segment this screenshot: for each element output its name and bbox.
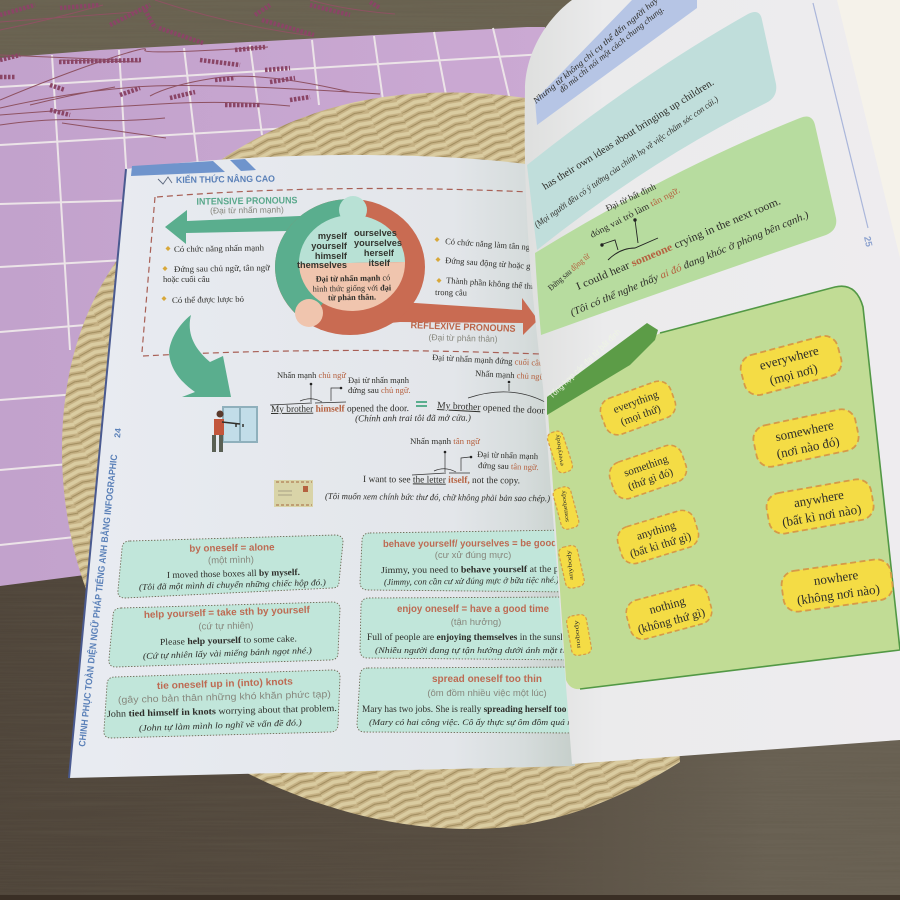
green example panel: I could hear someone crying in the next room.: [574, 195, 783, 293]
pill: something: (thứ gì đó): [626, 466, 675, 493]
left bullets: Có chức năng nhấn mạnh: [174, 242, 265, 254]
sentence 1 alternate: My brother opened the door himself: [437, 400, 578, 418]
sentence 2: itself: Nhấn mạnh tân ngữ: [410, 436, 480, 446]
circle diagram: [275, 196, 425, 335]
pronoun list: [297, 228, 402, 270]
right page (25): [525, 0, 900, 764]
heading: reflexive pronouns: (Đại từ phản thân): [428, 332, 498, 344]
teal example panel: [527, 12, 776, 250]
sentence 2: itself: (Tôi muốn xem chính bức thư đó, chữ không phải bản sao chép.): [325, 491, 550, 503]
pill: nothing: [623, 582, 715, 642]
card: tie oneself: (John tự làm mình lo nghĩ về vấn đề đó.): [139, 717, 302, 733]
panel tab: Tổng hợp các đại từ bất định: [546, 326, 623, 400]
pronoun list: themselves: [297, 260, 347, 270]
sentence 2: itself: đứng sau tân ngữ.: [478, 460, 539, 472]
heading: reflexive pronouns: REFLEXIVE PRONOUNS: [410, 320, 516, 335]
page side title: 24: [112, 427, 123, 438]
card: tie oneself: John tied himself in knots worrying about that problem.: [107, 704, 337, 720]
pill: anybody: anybody: [566, 550, 575, 580]
section heading: KIẾN THỨC NÂNG CAO: [176, 173, 275, 185]
card: spread oneself: Mary has two jobs. She is really spreading herself too thin.: [362, 704, 587, 714]
card: spread oneself: spread oneself too thin: [432, 674, 542, 685]
card: behave yourself: (Jimmy, con cần cư xử đúng mực ở bữa tiệc nhé.): [384, 575, 559, 587]
header tabs: [131, 159, 256, 176]
arrow: reflexive: [320, 298, 538, 335]
right bullets: Thành phần không thể thiếu: [446, 275, 542, 292]
right bullets: trong câu: [435, 287, 468, 298]
page number: 25: [861, 235, 874, 249]
blue note panel: đồ mà chỉ nói một cách chung chung.: [557, 4, 666, 95]
card: spread oneself: (ôm đồm nhiều việc một lúc): [427, 688, 547, 699]
sentence 1 alternate: Nhấn mạnh chủ ngữ: [475, 368, 545, 382]
dried flower branches: [0, 0, 395, 138]
left page (24): [69, 155, 594, 778]
pill: everything: [597, 377, 679, 439]
page sheet: [525, 0, 900, 764]
arrow: intensive: [165, 210, 345, 244]
card: enjoy oneself: [360, 597, 580, 660]
page side title: CHINH PHỤC TOÀN DIỆN NGỮ PHÁP TIẾNG ANH BẰNG INFOGRAPHIC: [76, 454, 119, 747]
teal example panel: has their own ideas about bringing up children.: [541, 77, 716, 193]
panel tab: [546, 323, 658, 415]
pill: somebody: [552, 485, 580, 531]
pill: somewhere: (nơi nào đó): [775, 433, 841, 461]
green example panel: đóng vai trò làm tân ngữ.: [588, 185, 682, 240]
card: help yourself: [109, 602, 340, 667]
card: spread oneself: (Mary có hai công việc. Cô ấy thực sự ôm đồm quá nhiều.): [369, 717, 594, 727]
sentence 1 alternate: [432, 352, 578, 418]
pill: anything: [614, 507, 702, 567]
card: tie oneself: tie oneself up in (into) knots: [157, 676, 294, 692]
circle note: Đại từ nhấn mạnh có: [316, 273, 390, 284]
pronoun list: itself: [369, 258, 391, 268]
lilac tiled mat: [0, 27, 545, 586]
blue note panel: Nhưng từ không chỉ cụ thể đến người hay: [530, 0, 660, 106]
pill: something: [606, 442, 690, 502]
sentence 1: himself: đứng sau chủ ngữ.: [348, 385, 411, 395]
pill: everywhere: (mọi nơi): [768, 361, 819, 388]
card: tie oneself: (gây cho bản thân những khó khăn phức tạp): [118, 689, 331, 706]
card: help yourself: (cứ tự nhiên): [198, 621, 254, 632]
left bullets: Có thể được lược bỏ: [172, 294, 244, 305]
pill: anything: anything: [635, 520, 677, 543]
card: behave yourself: (cư xử đúng mực): [435, 550, 511, 561]
pill: everywhere: [738, 333, 845, 398]
sentence 2: itself: [325, 436, 550, 503]
round woven seagrass mat: [62, 93, 680, 829]
pill: anywhere: [764, 477, 876, 536]
pill: everywhere: everywhere: [758, 343, 820, 373]
heading: reflexive pronouns: [410, 320, 516, 344]
green example panel: (Tôi có thể nghe thấy ai đó đang khóc ở phòng bên cạnh.): [569, 210, 811, 319]
card: by oneself: I moved those boxes all by myself.: [167, 567, 300, 580]
card: by oneself: by oneself = alone: [189, 542, 275, 555]
pronoun list: yourselves: [354, 238, 402, 248]
card: help yourself: help yourself = take sth by yourself: [144, 605, 311, 621]
pill: everything: everything: [612, 389, 661, 416]
big curved arrow: [169, 315, 231, 397]
sentence 1: himself: Nhấn mạnh chủ ngữ: [277, 370, 346, 380]
pill: nowhere: [780, 558, 894, 613]
pill: somebody: somebody: [561, 490, 571, 522]
pill: nobody: [566, 614, 592, 656]
pill: nobody: nobody: [574, 620, 582, 648]
sentence 2: itself: Đại từ nhấn mạnh: [477, 449, 539, 461]
right bullets: [434, 236, 549, 298]
card: help yourself: Please help yourself to some cake.: [160, 633, 297, 647]
card: by oneself: [118, 535, 343, 598]
circle note: [313, 273, 392, 302]
left bullets: [162, 242, 270, 305]
pill: everything: (mọi thứ): [619, 403, 663, 428]
pill: anybody: [558, 544, 585, 589]
blue note panel: [530, 0, 697, 125]
card: spread oneself: [357, 667, 594, 733]
sentence 1: himself: Đại từ nhấn mạnh: [348, 375, 410, 385]
pronoun list: himself: [315, 251, 348, 261]
sentence 1: himself: [270, 370, 471, 423]
pill: nowhere: nowhere: [813, 567, 859, 588]
pill: everybody: [546, 430, 574, 474]
icon: person at window: [212, 406, 258, 452]
card: enjoy oneself: Full of people are enjoying themselves in the sunshine.: [367, 632, 579, 642]
green example panel: Đứng sau động từ: [546, 251, 592, 293]
teal example panel: (Mọi người đều có ý tưởng của chính họ về việc chăm sóc con cái.): [532, 94, 720, 230]
page sheet: [69, 155, 575, 778]
pronoun list: myself: [318, 231, 348, 241]
dashed frame: [142, 188, 540, 356]
right bullets: Có chức năng làm tân ngữ: [445, 236, 535, 252]
equals sign: [416, 402, 427, 406]
circle note: hình thức giống với đại: [313, 283, 392, 294]
pill: somewhere: [751, 407, 861, 469]
pronoun list: herself: [364, 248, 395, 258]
pronoun list: ourselves: [354, 228, 397, 238]
sentence 2: itself: I want to see the letter itself, not the copy.: [363, 474, 520, 486]
green example panel: Đại từ bất định: [604, 181, 658, 213]
pill: anywhere: anywhere: [793, 487, 845, 510]
card: behave yourself: Jimmy, you need to behave yourself at the party.: [381, 564, 576, 575]
large indefinite pronoun panel: [547, 286, 900, 689]
page margin rule: [813, 3, 868, 228]
pill: anywhere: (bất kì nơi nào): [781, 501, 862, 530]
left bullets: Đứng sau chủ ngữ, tân ngữ: [174, 262, 270, 274]
card: behave yourself: [360, 530, 576, 592]
pill: nowhere: (không nơi nào): [796, 581, 881, 608]
pill: nothing: (không thứ gì): [636, 605, 707, 636]
left bullets: hoặc cuối câu: [163, 274, 210, 284]
circle note: từ phản thân.: [328, 293, 376, 302]
card: enjoy oneself: enjoy oneself = have a good time: [397, 604, 550, 615]
card: by oneself: (một mình): [208, 555, 254, 566]
sentence 1 alternate: Đại từ nhấn mạnh đứng cuối câu: [432, 352, 544, 368]
pill: everybody: everybody: [555, 434, 565, 466]
icon: envelope: [274, 480, 313, 507]
pill: anything: (bất kì thứ gì): [628, 530, 693, 561]
right bullets: Đứng sau động từ hoặc giới từ: [445, 255, 549, 272]
white surface top right: [830, 0, 900, 270]
card: by oneself: (Tôi đã một mình di chuyển những chiếc hộp đó.): [139, 577, 326, 592]
heading: intensive pronouns: [196, 195, 298, 216]
card: enjoy oneself: (tận hưởng): [451, 617, 501, 628]
pill: nothing: nothing: [648, 594, 687, 617]
pronoun list: yourself: [311, 241, 348, 251]
green example panel: [535, 117, 836, 335]
heading: intensive pronouns: INTENSIVE PRONOUNS: [196, 195, 298, 208]
card: help yourself: (Cứ tự nhiên lấy vài miếng bánh ngọt nhé.): [143, 645, 312, 661]
card: behave yourself: behave yourself/ yourselves = be good: [383, 538, 557, 550]
pill: somewhere: somewhere: [774, 417, 835, 444]
card: tie oneself: [104, 670, 340, 738]
sentence 1: himself: My brother himself opened the door.: [271, 403, 409, 415]
card: enjoy oneself: (Nhiều người đang tự tận hưởng dưới ánh mặt trời.): [375, 645, 580, 655]
book spine edge: [69, 169, 126, 778]
pill: something: something: [622, 453, 670, 479]
heading: intensive pronouns: (Đại từ nhấn mạnh): [210, 204, 284, 216]
sentence 1: himself: (Chính anh trai tôi đã mở cửa.): [355, 413, 471, 423]
